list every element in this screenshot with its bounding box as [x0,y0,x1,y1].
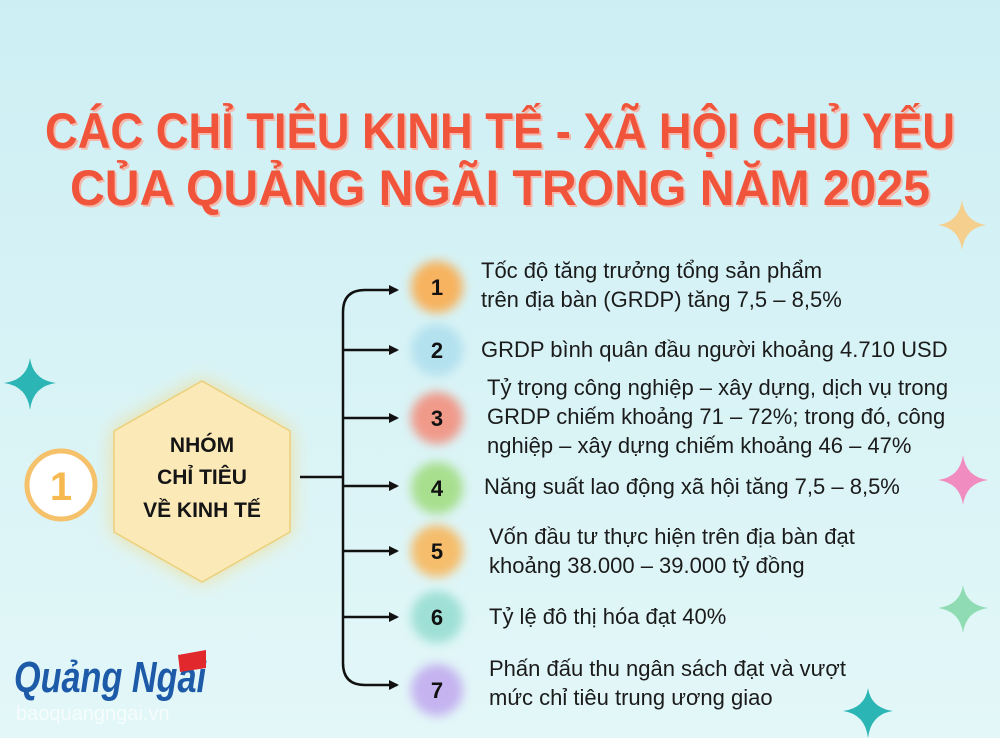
item 6 text: Tỷ lệ đô thị hóa đạt 40% [489,604,726,629]
number circles: 5 [431,539,443,564]
icon: sparkle right pink [938,455,988,505]
icon: sparkle bottom teal [843,688,893,738]
item 7 text [489,656,846,710]
icon: sparkle top right [938,200,986,250]
connector tree [300,290,397,685]
number circles [411,261,463,716]
item 5 text: khoảng 38.000 – 39.000 tỷ đồng [489,553,805,578]
group number badge: 1 [50,465,72,509]
item 7 text: mức chỉ tiêu trung ương giao [489,685,773,710]
icon: sparkle right green [938,585,988,633]
hexagon group: VỀ KINH TẾ [143,499,261,522]
group number badge [27,451,95,519]
item 1 text [481,258,842,312]
number circles: 2 [431,338,443,363]
hexagon group [114,381,290,582]
number circles: 4 [431,476,444,501]
logo [14,650,207,725]
item 5 text: Vốn đầu tư thực hiện trên địa bàn đạt [489,524,855,549]
number circles: 6 [431,605,443,630]
item 3 text: Tỷ trọng công nghiệp – xây dựng, dịch vụ trong [487,375,948,400]
number circles: 3 [431,406,443,431]
icon: sparkle left teal [4,358,56,410]
item 3 text: nghiệp – xây dựng chiếm khoảng 46 – 47% [487,433,911,458]
hexagon group: CHỈ TIÊU [157,465,247,489]
item 3 text: GRDP chiếm khoảng 71 – 72%; trong đó, công [487,404,945,429]
title: CỦA QUẢNG NGÃI TRONG NĂM 2025 [70,159,930,216]
hexagon group: NHÓM [170,433,234,457]
item 4 text: Năng suất lao động xã hội tăng 7,5 – 8,5% [484,474,900,499]
item 1 text: Tốc độ tăng trưởng tổng sản phẩm [481,258,822,283]
number circles: 1 [431,275,443,300]
logo: Quảng Ngãi [14,653,207,702]
number circles: 7 [431,678,443,703]
item 5 text [489,524,855,578]
item 1 text: trên địa bàn (GRDP) tăng 7,5 – 8,5% [481,287,842,312]
item 3 text [487,375,948,458]
logo: baoquangngai.vn [16,703,169,725]
item 7 text: Phấn đấu thu ngân sách đạt và vượt [489,656,846,681]
title [45,102,957,218]
item 2 text: GRDP bình quân đầu người khoảng 4.710 USD [481,337,948,362]
title: CỦA QUẢNG NGÃI TRONG NĂM 2025 [72,161,932,218]
